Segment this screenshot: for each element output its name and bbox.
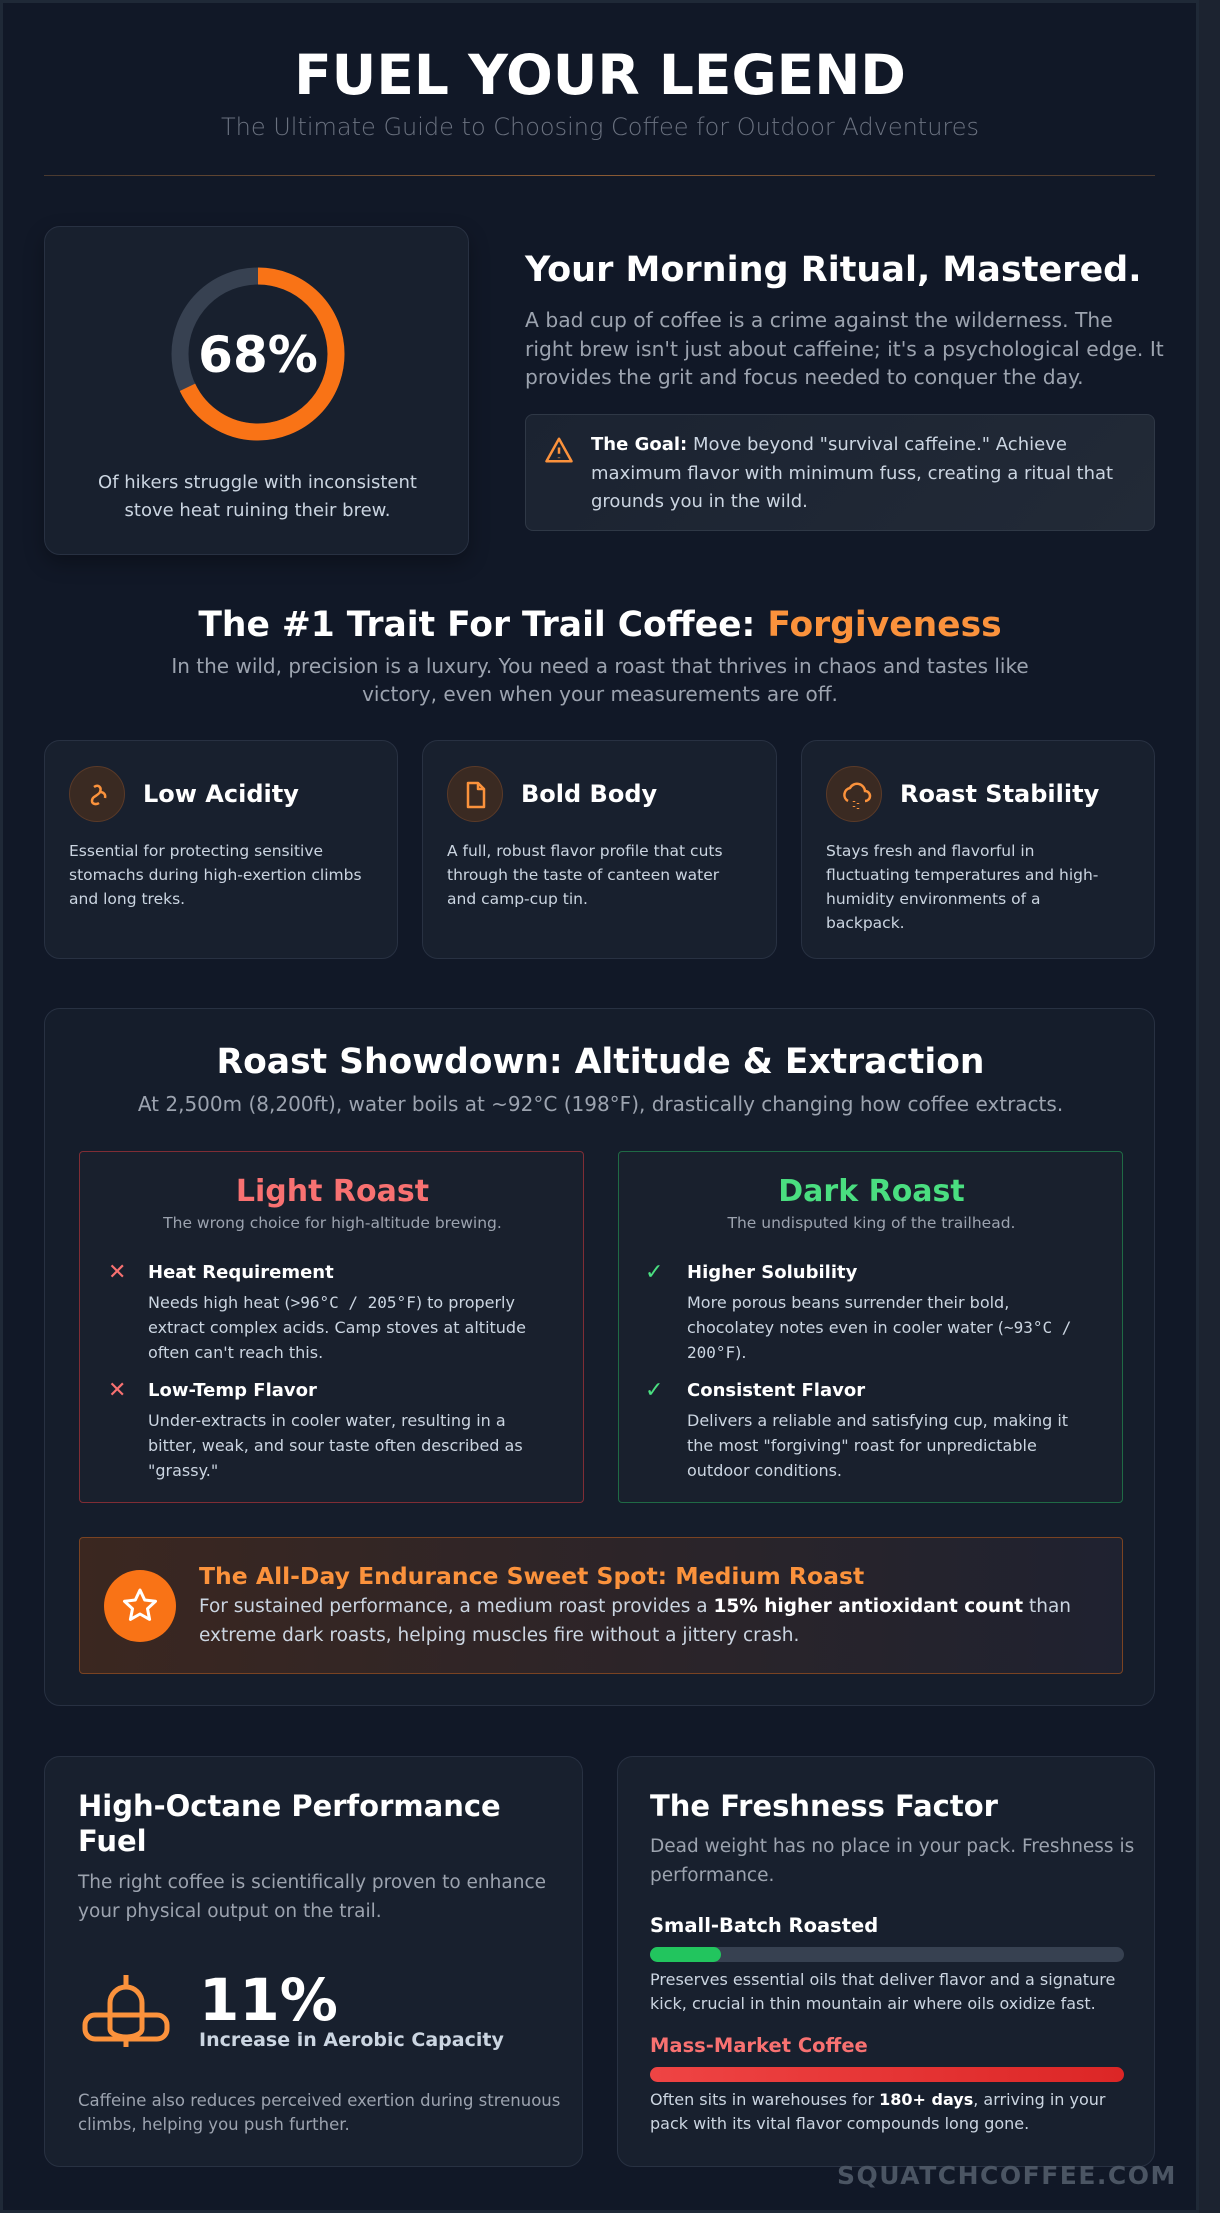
icon: warning — [545, 438, 573, 462]
panel: light roast: Low-Temp Flavor — [148, 1380, 317, 1401]
panel: light roast: Heat Requirement — [148, 1262, 334, 1283]
donut chart — [172, 268, 344, 440]
bar: small-batch — [650, 1914, 1124, 2012]
bar: mass-market — [650, 2034, 1124, 2133]
panel: bold body: Bold Body — [521, 780, 657, 808]
bar: small-batch: Small-Batch Roasted — [650, 1914, 878, 1937]
panel: light roast: The wrong choice for high-altitude brewing. — [163, 1214, 502, 1232]
panel: light roast: ✕ — [108, 1260, 126, 1285]
panel: light roast — [79, 1151, 584, 1503]
panel: dark roast: Delivers a reliable and satisfying cup, making it the most "forgiving" roast for unpredictable outdoor conditions. — [687, 1411, 1068, 1480]
panel: light roast: Light Roast — [236, 1174, 429, 1209]
watermark: SQUATCHCOFFEE.COM — [837, 2161, 1177, 2190]
panel: dark roast: ✓ — [645, 1260, 663, 1285]
panel: dark roast: More porous beans surrender their bold, chocolatey notes even in cooler water (~93°C / 200°F). — [687, 1293, 1071, 1362]
panel: bold body — [422, 740, 777, 959]
panel: dark roast: ✓ — [645, 1378, 663, 1403]
item: higher solubility — [645, 1260, 1071, 1362]
panel: roast stability: Roast Stability — [900, 780, 1099, 808]
text block: intro: right brew isn't just about caffeine; it's a psychological edge. It — [525, 336, 1164, 360]
caption: Of hikers struggle with inconsistent stove heat ruining their brew. — [98, 472, 417, 521]
panel: roast stability: Stays fresh and flavorful in fluctuating temperatures and high-humidity environments of a backpack. — [826, 842, 1098, 932]
panel: stat card — [44, 226, 469, 555]
item: consistent flavor — [645, 1378, 1068, 1480]
heading: forgiveness: The #1 Trait For Trail Coffee: Forgiveness — [198, 605, 1002, 645]
callout: medium roast: For sustained performance, a medium roast provides a 15% higher antioxidant count than extreme dark roasts, helping muscles fire without a jittery crash. — [199, 1596, 1071, 1646]
donut chart: 68% — [198, 326, 318, 384]
panel: low acidity: Low Acidity — [143, 780, 299, 808]
panel: dark roast: Consistent Flavor — [687, 1380, 865, 1401]
text block: intro: provides the grit and focus needed to conquer the day. — [525, 365, 1084, 389]
icon: star — [104, 1570, 176, 1642]
heading: morning ritual: Your Morning Ritual, Mastered. — [525, 250, 1142, 290]
panel: performance fuel — [44, 1756, 583, 2167]
panel: dark roast: Dark Roast — [778, 1174, 965, 1209]
panel: bold body: A full, robust flavor profile that cuts through the taste of canteen water and camp-cup tin. — [447, 842, 723, 908]
text block: intro — [525, 308, 1164, 389]
callout: medium roast: The All-Day Endurance Sweet Spot: Medium Roast — [199, 1562, 864, 1590]
stat: 11%: 11% — [199, 1966, 338, 2034]
text block: intro: A bad cup of coffee is a crime against the wilderness. The — [525, 308, 1113, 332]
panel: low acidity: Essential for protecting sensitive stomachs during high-exertion climbs and long treks. — [69, 842, 362, 908]
callout: goal: The Goal: Move beyond "survival caffeine." Achieve maximum flavor with minimum fuss, creating a ritual that grounds you in the wild. — [591, 434, 1113, 512]
subtitle: At 2,500m (8,200ft), water boils at ~92°C (198°F), drastically changing how coffee extracts. — [138, 1092, 1063, 1116]
panel: roast showdown — [44, 1008, 1155, 1706]
item: heat requirement — [108, 1260, 526, 1362]
callout: medium roast — [79, 1537, 1123, 1674]
panel: performance fuel: Increase in Aerobic Capacity — [199, 2029, 504, 2051]
panel: freshness: The Freshness Factor — [650, 1789, 998, 1823]
icon: stomach — [69, 766, 125, 822]
icon: cloud — [826, 766, 882, 822]
bar: small-batch: Preserves essential oils that deliver flavor and a signature kick, crucial in thin mountain air where oils oxidize fast. — [650, 1970, 1115, 2012]
subtitle: The Ultimate Guide to Choosing Coffee for Outdoor Adventures — [221, 113, 979, 141]
heading: Roast Showdown: Altitude & Extraction — [217, 1042, 984, 1082]
bar: mass-market: Mass-Market Coffee — [650, 2034, 868, 2057]
panel: light roast: ✕ — [108, 1378, 126, 1403]
text block: forgiveness sub: In the wild, precision is a luxury. You need a roast that thrives in chaos and tastes like victory, even when your measurements are off. — [171, 654, 1029, 706]
icon: document — [447, 766, 503, 822]
panel: freshness — [617, 1756, 1155, 2167]
panel: freshness: Dead weight has no place in your pack. Freshness is performance. — [650, 1836, 1134, 1886]
panel: light roast: Under-extracts in cooler water, resulting in a bitter, weak, and sour taste often described as "grassy." — [148, 1411, 523, 1480]
panel: dark roast: Higher Solubility — [687, 1262, 857, 1283]
panel: performance fuel: The right coffee is scientifically proven to enhance your physical output on the trail. — [78, 1872, 546, 1922]
panel: performance fuel: Caffeine also reduces perceived exertion during strenuous climbs, helping you push further. — [78, 2091, 560, 2134]
callout: goal — [525, 414, 1155, 531]
panel: light roast: Needs high heat (>96°C / 205°F) to properly extract complex acids. Camp stoves at altitude often can't reach this. — [148, 1293, 526, 1362]
title: FUEL YOUR LEGEND — [294, 43, 906, 107]
panel: low acidity — [44, 740, 398, 959]
panel: dark roast — [618, 1151, 1123, 1503]
icon: kettlebell — [82, 1975, 170, 2047]
panel: roast stability — [801, 740, 1155, 959]
panel: dark roast: The undisputed king of the trailhead. — [728, 1214, 1015, 1232]
panel: performance fuel: High-Octane Performance Fuel — [78, 1789, 501, 1858]
item: low-temp flavor — [108, 1378, 523, 1480]
bar: mass-market: Often sits in warehouses for 180+ days, arriving in your pack with its vital flavor compounds long gone. — [650, 2090, 1106, 2133]
